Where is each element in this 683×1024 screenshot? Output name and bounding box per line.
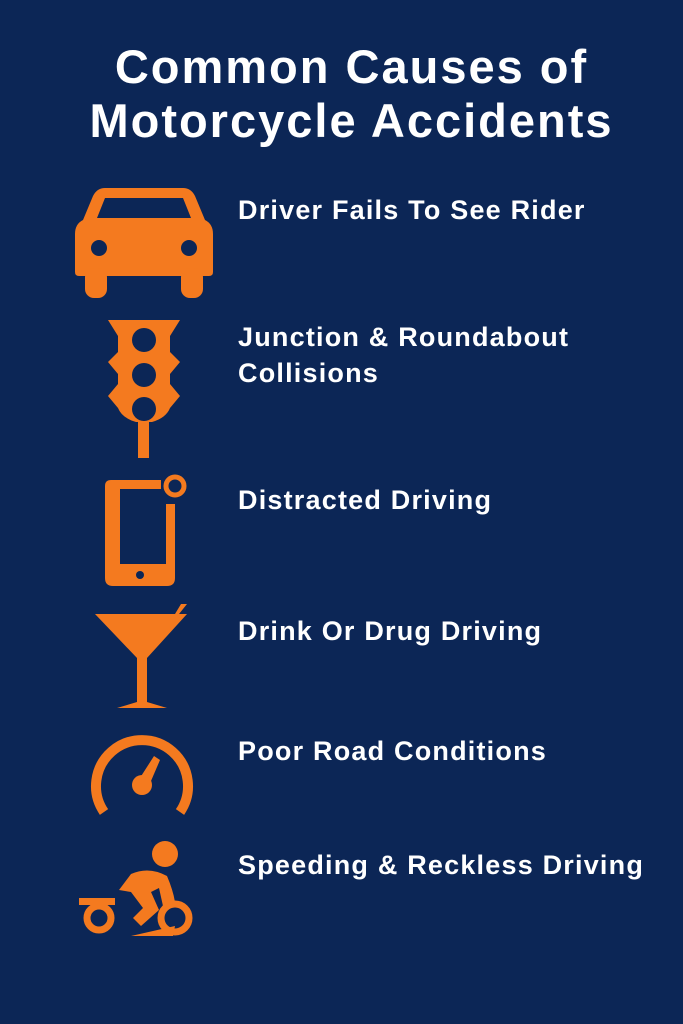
title: Common Causes of	[115, 40, 588, 93]
title: Motorcycle Accidents	[89, 94, 614, 147]
icon: car	[75, 188, 213, 298]
text: junction: Collisions	[238, 358, 379, 388]
text: distracted driving: Distracted Driving	[238, 485, 492, 515]
text: junction	[238, 322, 569, 388]
icon: glass	[95, 604, 187, 708]
text: speeding: Speeding & Reckless Driving	[238, 850, 644, 880]
icon: phone	[105, 474, 186, 586]
text: driver fails to see rider: Driver Fails To See Rider	[238, 195, 586, 225]
text: junction: Junction & Roundabout	[238, 322, 569, 352]
icon: gauge	[90, 735, 194, 815]
text: drink: Drink Or Drug Driving	[238, 616, 542, 646]
text: poor road: Poor Road Conditions	[238, 736, 547, 766]
icon: motorcyclist	[79, 841, 192, 936]
icon: traffic light	[108, 320, 180, 458]
title	[89, 40, 614, 147]
